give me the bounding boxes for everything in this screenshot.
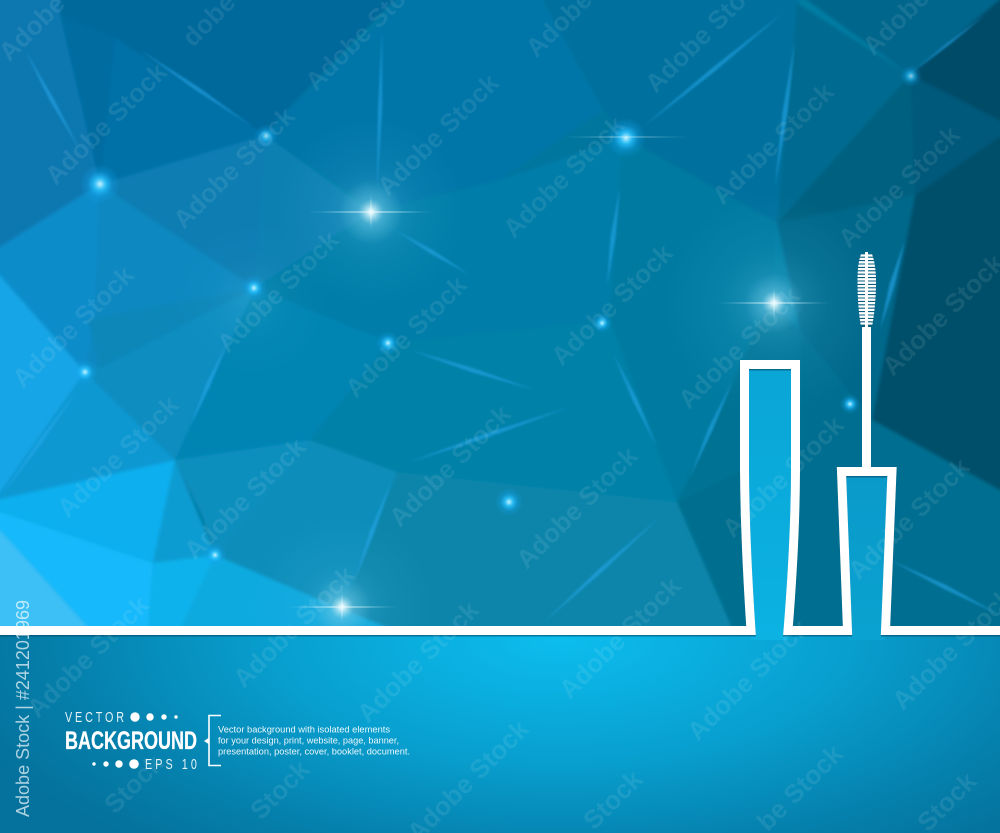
stock watermarks: Adobe Stock — [706, 76, 840, 210]
stock watermarks: Adobe Stock — [21, 589, 155, 723]
stock watermarks: Adobe Stock — [681, 612, 815, 746]
stock watermarks: Stock — [98, 748, 170, 819]
bracket — [209, 716, 221, 766]
logo block — [65, 708, 221, 772]
description text: Vector background with isolated elements — [218, 724, 390, 736]
stock watermarks: Adobe Stock — [716, 409, 850, 543]
mascara tube interior — [744, 364, 796, 640]
vector label: VECTOR — [65, 708, 124, 725]
stock watermarks: Adobe Stock — [545, 237, 679, 371]
top dots — [130, 712, 178, 722]
stock watermarks: Adobe Stock — [371, 67, 505, 201]
bottom dots — [92, 759, 139, 769]
mascara wand and brush — [858, 252, 876, 467]
description text: for your design, print, website, page, banner, — [218, 736, 399, 746]
stock watermarks: Adobe Stock — [510, 440, 644, 574]
stock watermarks: Adobe Stock — [351, 594, 485, 728]
stock watermarks: Adobe Stock — [211, 224, 345, 358]
vertical stock id: Adobe Stock | #241201969 — [13, 600, 33, 817]
stock watermarks: Adobe Stock — [842, 451, 976, 585]
background label: BACKGROUND — [65, 727, 197, 755]
stock watermarks: Adobe Stock — [6, 259, 140, 393]
white outline baseline with mascara silhouette — [0, 364, 1000, 632]
stock watermarks: Adobe Stock — [39, 56, 173, 190]
bracket pointer — [204, 738, 208, 744]
stock watermarks: Adobe Stock — [339, 269, 473, 403]
mascara cap interior — [842, 472, 892, 640]
stock watermarks: Adobe Stock — [497, 109, 631, 243]
description text: presentation, poster, cover, booklet, document. — [218, 746, 410, 758]
stock watermarks: Adobe Stock — [832, 119, 966, 253]
light rays — [0, 13, 1000, 623]
stock watermarks: Adobe Stock — [178, 431, 312, 565]
eps label: EPS 10 — [145, 755, 197, 772]
stock watermarks: Adobe Stock — [553, 570, 687, 704]
lower gradient band — [0, 635, 1000, 833]
description text — [218, 724, 410, 758]
stock watermarks: Stock — [244, 754, 316, 825]
polygon background panel — [0, 0, 1000, 640]
stock watermarks: Adobe Stock — [167, 100, 301, 234]
stock watermarks: Adobe Stock — [51, 389, 185, 523]
stock watermarks: Adobe Stock — [227, 559, 361, 693]
stock watermarks: Adobe Stock — [383, 398, 517, 532]
stock watermarks: Adobe Stock — [672, 280, 806, 414]
glowing stars — [72, 65, 922, 697]
